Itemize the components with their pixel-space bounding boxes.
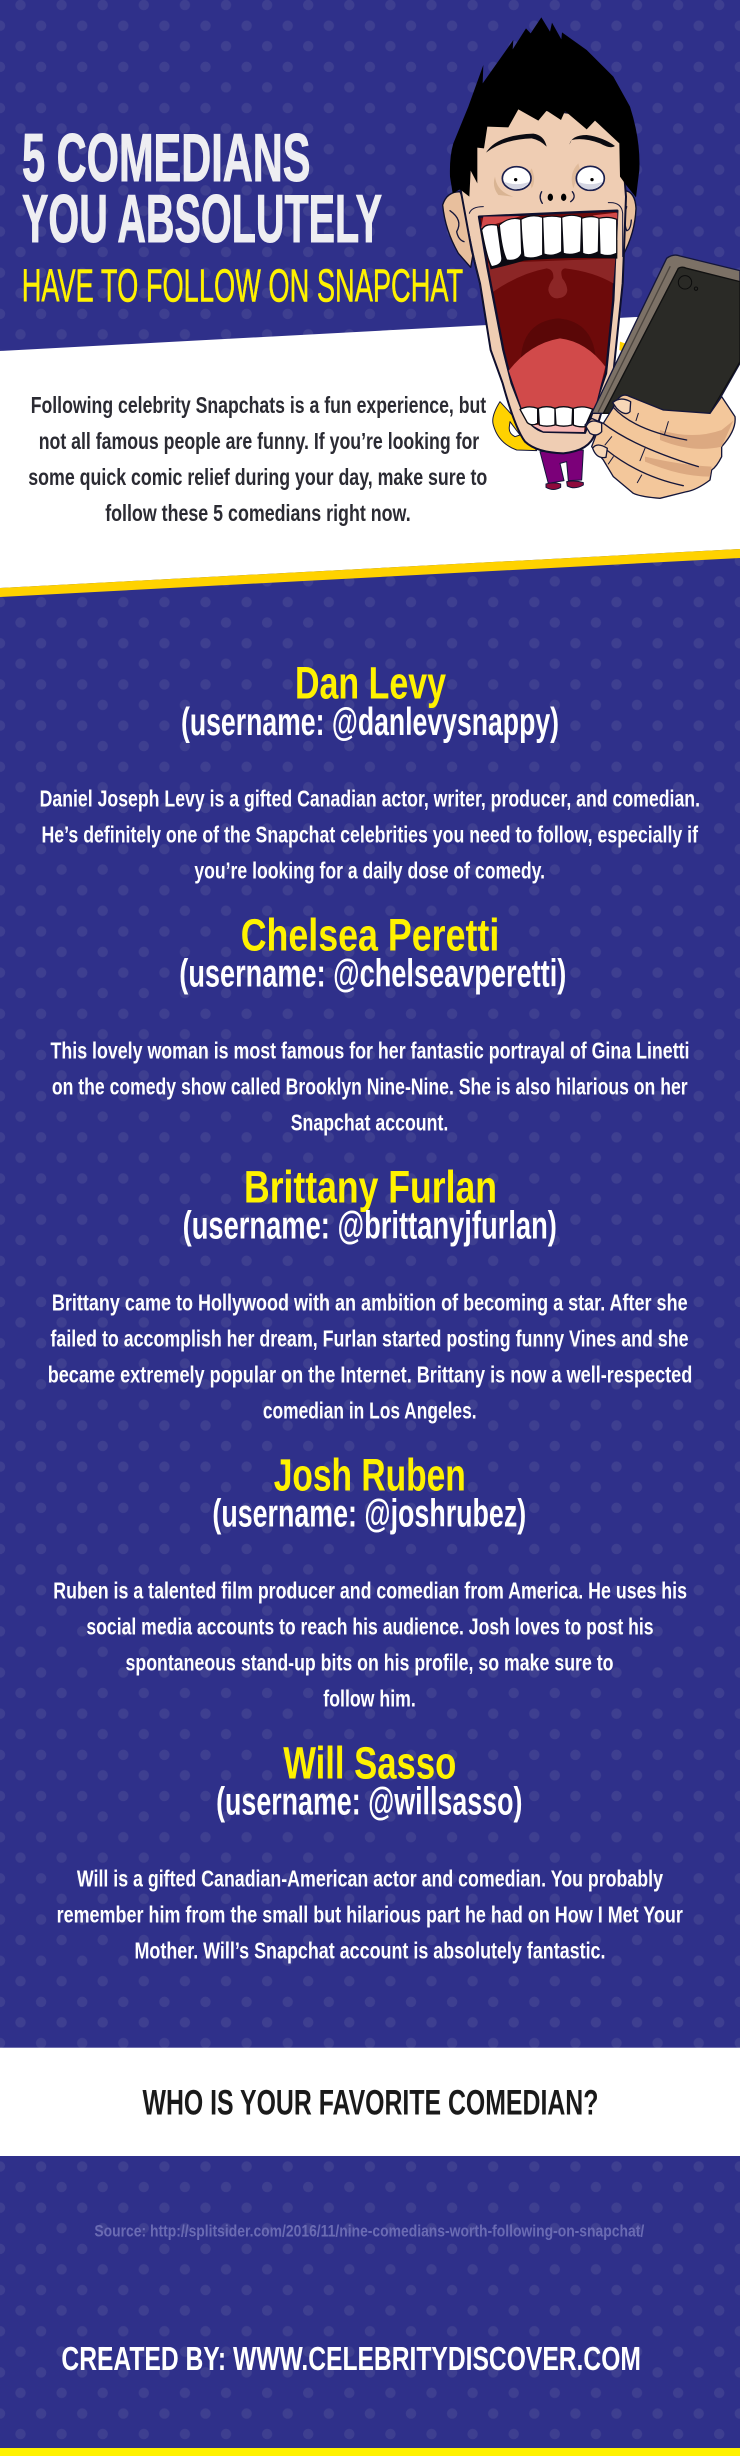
section: Will Sasso: [57, 1738, 683, 1964]
purple legs and shoes: [540, 450, 583, 489]
mouth interior: [479, 211, 617, 433]
title: [22, 120, 463, 312]
username: (username: @joshrubez): [212, 1493, 526, 1536]
panel: intro white slanted band: [0, 312, 740, 597]
ears: [443, 191, 636, 267]
section: Josh Ruben: [53, 1450, 687, 1712]
yellow shirt: [493, 342, 625, 451]
description: [48, 1290, 692, 1424]
smartphone: [592, 255, 740, 413]
description: comedian in Los Angeles.: [263, 1398, 477, 1424]
name: Brittany Furlan: [244, 1162, 497, 1213]
description: you’re looking for a daily dose of comedy.: [194, 858, 545, 884]
upper gum and teeth: [481, 213, 617, 269]
username: (username: @chelseavperetti): [179, 953, 566, 996]
hair: [450, 17, 639, 197]
description: Mother. Will’s Snapchat account is absolutely fantastic.: [134, 1938, 606, 1964]
username: (username: @brittanyjfurlan): [183, 1205, 557, 1248]
cheek lines: [468, 203, 623, 293]
title: YOU ABSOLUTELY: [22, 181, 382, 257]
username: (username: @willsasso): [216, 1781, 522, 1824]
description: [50, 1038, 690, 1136]
title: 5 COMEDIANS: [22, 120, 310, 196]
intro text: follow these 5 comedians right now.: [105, 500, 411, 526]
intro text: Following celebrity Snapchats is a fun experience, but: [31, 392, 486, 418]
name: Chelsea Peretti: [241, 910, 499, 961]
section: Brittany Furlan: [48, 1162, 692, 1424]
eyebrows: [486, 134, 615, 153]
description: follow him.: [323, 1686, 416, 1712]
illustration: screaming cartoon man holding a phone: [443, 17, 740, 498]
lower teeth: [520, 407, 593, 427]
bottom yellow bar: [0, 2448, 740, 2456]
eyes: [494, 163, 604, 197]
description: Snapchat account.: [291, 1110, 448, 1136]
description: [57, 1866, 683, 1964]
name: Will Sasso: [283, 1738, 456, 1789]
name: Josh Ruben: [274, 1450, 466, 1501]
nose: [540, 192, 574, 203]
panel: question band: [0, 2048, 740, 2156]
intro text: [28, 392, 487, 526]
intro text: some quick comic relief during your day, make sure to: [28, 464, 487, 490]
intro text: not all famous people are funny. If you’re looking for: [39, 428, 479, 454]
hand: [585, 395, 735, 498]
section: Dan Levy: [40, 657, 700, 884]
name: Dan Levy: [295, 657, 447, 708]
description: [53, 1578, 687, 1712]
section: Chelsea Peretti: [50, 910, 690, 1136]
username: (username: @danlevysnappy): [181, 701, 559, 744]
head and jaw: [461, 107, 626, 453]
description: [40, 786, 700, 884]
